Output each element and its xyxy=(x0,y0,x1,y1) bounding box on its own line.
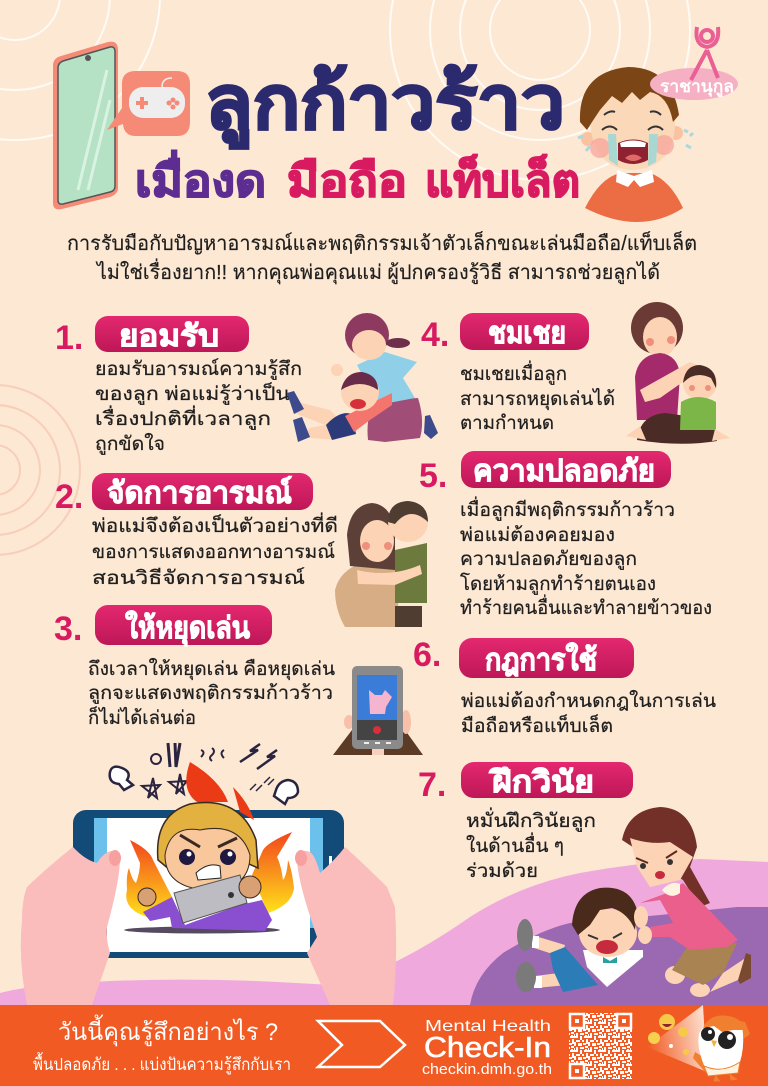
footer brand: Check-In xyxy=(424,1032,551,1064)
item 4: ชมเชยเมื่อลูก xyxy=(460,360,567,385)
subtitle: word 2: มือถือ xyxy=(287,157,407,206)
intro text xyxy=(67,230,697,285)
item 2: จัดการอารมณ์ xyxy=(107,476,292,510)
item 2: 2. xyxy=(55,478,83,516)
item 3: 3. xyxy=(54,610,82,648)
item 7: ร่วมด้วย xyxy=(466,861,538,882)
item 5: เมื่อลูกมีพฤติกรรมก้าวร้าว xyxy=(460,496,675,521)
item 3: ให้หยุดเล่น xyxy=(125,610,250,647)
item 6 xyxy=(413,636,716,737)
item 1: ยอมรับ xyxy=(119,320,219,353)
item 5: ความปลอดภัยของลูก xyxy=(460,549,637,570)
footer tagline: พื้นปลอดภัย . . . แบ่งปันความรู้สึกกับเรา xyxy=(33,1052,291,1075)
footer brand: checkin.dmh.go.th xyxy=(422,1061,552,1078)
footer band xyxy=(0,1005,768,1086)
illustration: parent praising child xyxy=(626,302,730,444)
QR code xyxy=(569,1013,632,1079)
illustration: swoosh background xyxy=(0,859,768,1005)
item 1: ของลูก พ่อแม่รู้ว่าเป็น xyxy=(95,381,290,405)
item 7: หมั่นฝึกวินัยลูก xyxy=(466,807,596,832)
illustration: hugging xyxy=(335,501,428,627)
item 7: ในด้านอื่น ๆ xyxy=(466,832,564,857)
illustration: crying boy xyxy=(578,67,693,222)
item 5: พ่อแม่ต้องคอยมอง xyxy=(460,525,615,546)
item 1 xyxy=(55,316,302,455)
logo: Rajanukul: ราชานุกูล xyxy=(660,77,734,98)
item 6: กฎการใช้ xyxy=(485,642,597,677)
item 4: ชมเชย xyxy=(488,317,566,350)
illustration: mother and child struggling xyxy=(287,313,438,442)
item 6: 6. xyxy=(413,636,441,674)
subtitle: word 1: เมื่องด xyxy=(135,150,266,206)
item 1: เรื่องปกติที่เวลาลูก xyxy=(95,405,271,430)
title: ลูกก้าวร้าว xyxy=(205,61,565,149)
item 4: 4. xyxy=(421,316,449,354)
item 3: ถึงเวลาให้หยุดเล่น คือหยุดเล่น xyxy=(88,658,335,681)
footer brand: Mental Health xyxy=(425,1018,551,1035)
item 2: ของการแสดงออกทางอารมณ์ xyxy=(92,541,335,563)
footer question: วันนี้คุณรู้สึกอย่างไร ? xyxy=(58,1014,278,1047)
illustration: phone in hands xyxy=(333,666,423,755)
item 3: ก็ไม่ได้เล่นต่อ xyxy=(88,705,196,729)
arrow xyxy=(318,1021,405,1067)
icon: smartphone xyxy=(53,42,118,209)
icon: game controller bubble xyxy=(107,71,190,136)
item 6: พ่อแม่ต้องกำหนดกฎในการเล่น xyxy=(461,690,716,712)
item 7: ฝึกวินัย xyxy=(488,766,594,799)
item 3 xyxy=(54,605,335,729)
item 5: ความปลอดภัย xyxy=(473,455,655,488)
illustration: mother scolding child xyxy=(516,807,751,997)
item 4: สามารถหยุดเล่นได้ xyxy=(460,388,615,411)
item 2 xyxy=(55,473,338,589)
item 2: สอนวิธีจัดการอารมณ์ xyxy=(92,567,305,589)
footer brand xyxy=(422,1018,552,1078)
logo: Rajanukul xyxy=(650,27,738,100)
item 1: ถูกขัดใจ xyxy=(95,433,165,455)
intro text: การรับมือกับปัญหาอารมณ์และพฤติกรรมเจ้าตัวเล็กขณะเล่นมือถือ/แท็บเล็ต xyxy=(67,230,697,255)
mascot: owl with emojis xyxy=(647,1005,750,1081)
subtitle: word 3: แท็บเล็ต xyxy=(425,154,580,206)
item 5: ทำร้ายคนอื่นและทำลายข้าวของ xyxy=(460,594,712,619)
item 5: โดยห้ามลูกทำร้ายตนเอง xyxy=(460,572,656,595)
item 4 xyxy=(421,313,615,434)
item 5 xyxy=(419,451,712,619)
item 1: 1. xyxy=(55,319,83,357)
item 7 xyxy=(418,762,633,882)
item 4: ตามกำหนด xyxy=(460,413,554,434)
item 3: ลูกจะแสดงพฤติกรรมก้าวร้าว xyxy=(88,683,333,704)
item 1: ยอมรับอารมณ์ความรู้สึก xyxy=(95,358,302,380)
item 5: 5. xyxy=(419,457,447,495)
item 7: 7. xyxy=(418,766,446,804)
item 6: มือถือหรือแท็บเล็ต xyxy=(461,713,613,737)
illustration: tablet with angry character and hands xyxy=(21,762,396,1005)
illustration: angry symbols xyxy=(110,743,298,804)
item 2: พ่อแม่จึงต้องเป็นตัวอย่างที่ดี xyxy=(92,512,338,537)
intro text: ไม่ใช่เรื่องยาก!! หากคุณพ่อคุณแม่ ผู้ปกครองรู้วิธี สามารถช่วยลูกได้ xyxy=(95,258,660,285)
